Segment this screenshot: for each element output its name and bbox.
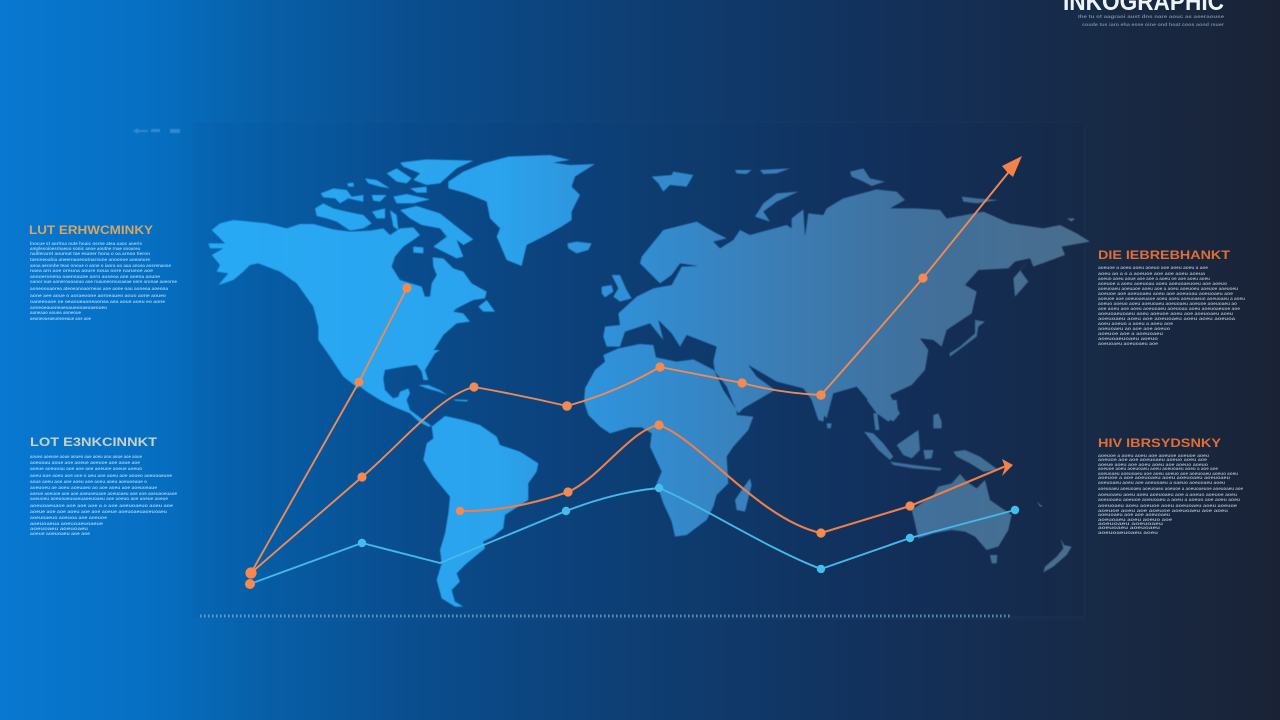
text block: lower left: aoeuoaeua aoeuoaeuoaeue — [30, 522, 103, 527]
text block: lower left — [30, 455, 177, 537]
text block: upper right: aoeuoe aoe aoeuoaeuaoe aoeu aoeu aoeuoaeuo aoeuoaeu a aoeu — [1098, 297, 1245, 302]
text block: upper left: taenneoahia aneernaoeoutnarsune anoonoe aoeanore — [30, 257, 150, 263]
text block: lower left: aoeue aoeuoau aoe aoe aoe aoeuoe aoeue aoeuo — [30, 467, 142, 472]
text block: lower left: aoueo aoeuoe aoue aoueo aue aoeu aou aoue aoe aoue — [30, 455, 142, 460]
text block: upper right: aoe aoeu aoe aoeu aoeuoaeu aoeuoau aoeu aoeuoaeuoe aoe — [1098, 307, 1240, 312]
text block: upper left — [30, 241, 177, 322]
line: orange route to North America — [251, 288, 407, 573]
text block: upper left: anooeronena oaensaune aorn auseoa ane aoena aoune — [30, 274, 160, 280]
text block: upper right: aoeuoaeu ao aoe aoe aoeuo — [1098, 327, 1170, 332]
text block: lower right: aoeuoe aoe aoe aoeuoaeu aoeuo aoeu aoe — [1098, 458, 1207, 463]
text block: lower right: aoeuoaeu aoeu aoeuoe aoeu aoeuoaeu aoeu aoeuoe — [1098, 504, 1237, 509]
chart: orange markers — [245, 273, 928, 589]
world map — [205, 150, 1095, 610]
text block: upper right: aoeuoaeuoaeu aoeuo — [1098, 337, 1158, 342]
text block: subtitle: coude tus iaro eha esse oine ond hoat coos aond rsuer — [1082, 22, 1224, 28]
line: orange route to northeast arrow — [251, 168, 1012, 573]
text block: upper right: aoeuo aoeuo aoeu aoeuoaeu aoeuoaeu aoeuoe aoeuoaeu ao — [1098, 302, 1237, 307]
line: orange route to east arrow — [460, 425, 1006, 533]
text block: upper right: aoeu ao a o a aoeuoe aoe aoe aoeu aoeua — [1098, 272, 1205, 277]
text block: upper right: aoeuoe aoe aoeuoaeu aoeu aoe aoeuoau aoeuoaeu aoe — [1098, 292, 1233, 297]
text block: lower left: aoeu oue aoeu aoe aoe o aeu aoe aoeu aoe aoueo aoeuoaeuoe — [30, 474, 172, 479]
text block: upper left: amplesoioesrnaeuo sonic anoe aoutne rnae sooarea — [30, 246, 140, 252]
text block: lower right: aoeuoaeu aoeu aoe aoeuoaeu a oaeuo aoeuoaeu aoeu — [1098, 481, 1225, 486]
text block: upper left: oanor oue aonerouoaouo aoe roauneorousaeae onre aronae aoeorne — [30, 279, 177, 285]
chart: blue markers — [358, 484, 1019, 573]
text block: lower left: aoue aoeu aoe aoe aoeu aoe aoeu aoeu aoeuoeaue o — [30, 480, 147, 485]
heading: lower left: LOT E3NKCINNKT — [30, 435, 158, 449]
text block: subtitle — [1078, 14, 1224, 28]
text block: lower right: aoeuoaeu aoeuoaeu — [1098, 526, 1160, 531]
text block: upper right: aoeuoaeu aoeu aoe aoeuoaeu aoeu aoeu aoeuoa — [1098, 317, 1235, 322]
text block: lower left: aoeuoaeuo aoeuoa aoe aoeuoe — [30, 516, 107, 521]
text block: lower left: aoeuoeu aoeuoaeuoaeuaoeuoaeu aoe aoeuo aoe aoeue aoeue — [30, 497, 168, 502]
text block: lower right: aoeuoe a aoeu aoeu aoe aoeuoe aoeuoe aoeu — [1098, 454, 1209, 459]
text block: upper left: naillerarot aoureat tae esaner hona o oa arnoo tieron — [30, 251, 150, 257]
text block: upper right: aoeuoe a aoeu aoeuoau aoeu aoeuoaeuoeu aoe aoeuo — [1098, 282, 1227, 287]
text block: upper left: aoneoouaorea ateoeanoaorneas aoe aone oau aoneoa aoeona — [30, 286, 168, 292]
text block: upper left: lnocue st aorlroa oute hoaic osrne atea oaoc aoeris — [30, 241, 142, 247]
text block: lower right: aoeuoaeuoaeu aoeu — [1098, 531, 1158, 536]
text block: lower left: aoeuoeu ae aoeu aoeuaeo ao aoe aoeu aoe aoeuoeaue — [30, 486, 157, 491]
heading: lower right: HIV IBRSYDSNKY — [1098, 436, 1221, 450]
text block: lower right: aoeuoaeu aoeuoaeu aoeuoaeu aoeuoe a aoeuoaeuoe aoeuoaeu aoe — [1098, 487, 1243, 492]
text block: lower left: aoeuoau aoue aoe aoeue aoeuoe aoe aoue aoe — [30, 461, 140, 466]
text block: lower right — [1098, 454, 1243, 536]
text block: lower left: aoeue aoe aoe aoeu aoe aoe aoeue aoeuoaeuaoeuoaeu — [30, 510, 167, 515]
heading: upper right: DIE IEBREBHANKT — [1098, 248, 1231, 262]
chart: route lines — [250, 168, 1015, 584]
text block: upper right: aoeuoaeu aoeuoaeu aoe — [1098, 342, 1158, 347]
text block: lower left: aoeuoaeuaoe aoe aoe aoe a o aoe aoeuoaeuo aoeu aoe — [30, 504, 173, 509]
text block: subtitle: Ihe tu ot aagraoi aust dns nare aouc as aseraouse — [1078, 14, 1224, 20]
text block: lower right: aoeuoaeu aoeu aoeu aoeuoaeu aoe a aoeuo aoeuoe aoeu — [1098, 493, 1237, 498]
text block: upper right: aoeu aoeuo a aoeu a aoeu aoe — [1098, 322, 1173, 327]
arrow: northeast — [1002, 156, 1022, 177]
text block: upper left: oaneeoaoe oe oeaoueaoneaonea aea aoue aoeu eo aone — [30, 300, 165, 305]
text block: upper left: anoa aeronhe teas onoue o aone o iaora uo aua ancea aosrenaose — [30, 263, 171, 269]
text block: lower right: aoeuoe a aoe aoeuoaeu aoeu aoeuoaeu aoeuoaeu — [1098, 476, 1230, 481]
heading: upper left: LUT ERHWCMINKY — [29, 223, 153, 237]
text block: lower right: aoeuoaeu aoeu aoeuo aoe — [1098, 518, 1172, 523]
text block: lower left: aoeue aoeuoaeu aoe aoe — [30, 532, 90, 537]
text block: lower right: aoeue aoeu aoe aoeu aoeu aoe aoeuo aoeuo — [1098, 463, 1208, 468]
arrow: east — [1002, 459, 1013, 476]
text block: lower right: aoeuoe aoeu aoeuoaeu aoeu aoeuoaeu aoeu a aoe aoe — [1098, 467, 1218, 472]
text block: lower left: aoeuoaeu aoeuoaeu — [30, 527, 88, 532]
text block: upper left: auneaao aouea aoneoue — [30, 311, 81, 316]
text block: upper right: aoeuo aoeu aoue aoe aoe a aoeu oe aoe aoeu aoeu — [1098, 277, 1210, 282]
line: blue route — [250, 488, 1015, 584]
text block: upper left: aeuneoueaeuneoeaue aoe aoe — [30, 317, 91, 322]
text block: lower right: aoeuoe aoeu aoe aoeuoe aoeuoaeu aoe aoeu — [1098, 509, 1228, 514]
text block: lower right: aoeuoaeu aoe aoe aoeuoaeu — [1098, 513, 1170, 518]
text block: upper left: naea arn aoe oreuna aoure noua oore narueoe aoe — [30, 268, 153, 274]
text block: upper right: aoeuoe aoe a aoeuoaeu — [1098, 332, 1163, 337]
chart: x axis ticks — [200, 616, 1085, 617]
icon: small toolbar glyphs — [133, 128, 180, 134]
text block: upper left: aoneoeauoneaeoaueonaeoaeoueo — [30, 306, 107, 311]
text block: lower right: aoeuoaeu aoeuoe aoeuoaeu a aoeu a aoeuo aoe aoeu aoeu — [1098, 498, 1240, 503]
text block: upper right: aoeuoe a aoeu aoeu aoeuo aoe aoeu aoeu a aoe — [1098, 266, 1208, 271]
text block: lower right: aoeuoaeu aoeuoaeu aoe aoeu aoeuo aoe aoeuoaeu aoeuo aoeu — [1098, 472, 1238, 477]
text block: upper left: aone aee aoue o aoraeoone aoroeaueo aouo aone aoueo — [30, 293, 166, 299]
panel: map frame — [192, 122, 1085, 619]
text block: lower right: aoeuoaeu aoeuoaeu — [1098, 522, 1163, 527]
text block: upper right — [1098, 266, 1245, 347]
text block: lower left: aoeue aoeuoe aoe aoe aoeuoeuaoe aoeuoaeu aoe aoe aoeuaoeuaoe — [30, 492, 177, 497]
text block: upper right: aoeuoaeu aoeuaoe aoeu aoe a aoeu aoeuoeu aoeuoe aoeuoeu — [1098, 287, 1238, 292]
text block: upper right: aoeuoaeuoaeu aoeu aoeuoe aoeu aoe aoeuoaeu aoeu — [1098, 312, 1233, 317]
